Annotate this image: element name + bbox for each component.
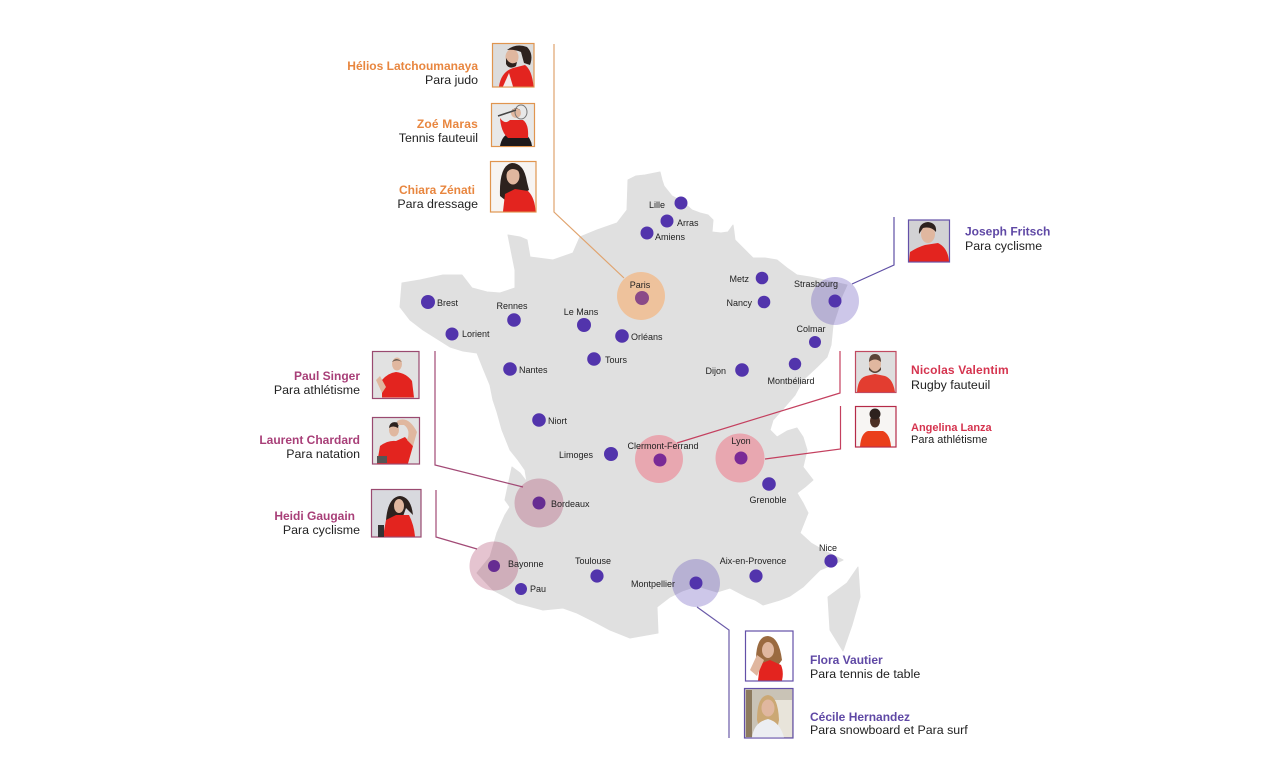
text: Angelina Lanza: Para athlétisme [911, 434, 987, 446]
text: Joseph Fritsch: Joseph Fritsch [965, 224, 1050, 238]
city labels: Aix-en-Provence [720, 556, 786, 566]
connector: Bayonne [436, 490, 477, 549]
text: Laurent Chardard [259, 433, 360, 461]
text: Chiara Zénati [397, 183, 478, 211]
text: Heidi Gaugain: Heidi Gaugain [274, 509, 355, 523]
text: Nicolas Valentim: Rugby fauteuil [911, 378, 990, 392]
city labels: Limoges [559, 450, 593, 460]
highlight: Montpellier [672, 559, 720, 607]
highlight: Strasbourg [811, 277, 859, 325]
city labels: Amiens [655, 232, 686, 242]
highlight: Clermont-Ferrand [635, 435, 683, 483]
text: Chiara Zénati: Chiara Zénati [399, 183, 475, 197]
text: Flora Vautier: Para tennis de table [810, 667, 920, 681]
text: Hélios Latchoumanaya: Hélios Latchoumanaya [347, 59, 478, 73]
text: Angelina Lanza [911, 422, 993, 446]
text: Zoé Maras [399, 117, 478, 145]
city labels: Colmar [796, 324, 826, 334]
city labels: Nancy [726, 298, 752, 308]
highlight: Paris [617, 272, 665, 320]
connector: Strasbourg [852, 217, 894, 284]
text: Nicolas Valentim [911, 363, 1009, 392]
connector: Paris [554, 44, 624, 278]
text: Paul Singer [274, 369, 360, 397]
text: Hélios Latchoumanaya: Para judo [425, 73, 478, 87]
photo: Chiara Zénati [490, 162, 536, 212]
photo: Hélios Latchoumanaya [492, 44, 534, 87]
city labels: Nice [819, 543, 837, 553]
photo: Flora Vautier [746, 631, 793, 681]
connector: Bordeaux [435, 351, 523, 487]
text: Paul Singer: Paul Singer [294, 369, 360, 383]
city labels: Lyon [731, 436, 751, 446]
city labels [437, 200, 838, 594]
city labels: Le Mans [564, 307, 599, 317]
city labels: Tours [605, 355, 628, 365]
city labels: Arras [677, 218, 699, 228]
city labels: Metz [729, 274, 749, 284]
photo: Laurent Chardard [372, 418, 420, 464]
city labels: Rennes [496, 301, 528, 311]
photo: Joseph Fritsch [908, 220, 950, 262]
text: Cécile Hernandez: Para snowboard et Para surf [810, 723, 968, 737]
city labels: Orléans [631, 332, 663, 342]
city labels: Niort [548, 416, 568, 426]
photo: Zoé Maras [492, 104, 534, 146]
text: Heidi Gaugain [274, 509, 360, 537]
text: Laurent Chardard: Para natation [286, 447, 360, 461]
highlight: Bordeaux [514, 478, 564, 528]
city labels: Bayonne [508, 559, 544, 569]
connector: Lyon [765, 406, 840, 459]
text: Flora Vautier: Flora Vautier [810, 653, 883, 667]
city labels: Paris [630, 280, 651, 290]
city labels: Toulouse [575, 556, 611, 566]
connector: Clermont-Ferrand [677, 351, 840, 443]
city labels: Clermont-Ferrand [627, 441, 699, 451]
photo: Paul Singer [372, 352, 419, 398]
city dots [421, 196, 842, 595]
text: Zoé Maras: Tennis fauteuil [399, 131, 478, 145]
highlighted city dots [488, 291, 748, 572]
photo: Cécile Hernandez [744, 688, 793, 738]
city labels: Brest [437, 298, 459, 308]
city labels: Strasbourg [794, 279, 838, 289]
highlight: Lyon [716, 434, 764, 482]
text: Cécile Hernandez: Cécile Hernandez [810, 710, 910, 724]
text: Laurent Chardard: Laurent Chardard [259, 433, 360, 447]
photo: Angelina Lanza [856, 406, 896, 447]
text: Chiara Zénati: Para dressage [397, 197, 478, 211]
connector: Montpellier [697, 607, 729, 738]
city labels: Montpellier [631, 579, 675, 589]
text: Paul Singer: Para athlétisme [274, 383, 360, 397]
text: Zoé Maras: Zoé Maras [417, 117, 478, 131]
highlight: Bayonne [470, 542, 518, 590]
city labels: Dijon [705, 366, 726, 376]
text: Nicolas Valentim: Nicolas Valentim [911, 363, 1009, 377]
text: Angelina Lanza: Angelina Lanza [911, 422, 993, 434]
text: Joseph Fritsch [965, 224, 1050, 253]
city labels: Bordeaux [551, 499, 590, 509]
city labels: Grenoble [749, 495, 787, 505]
city labels: Nantes [519, 365, 548, 375]
city labels: Pau [530, 584, 546, 594]
city labels: Lorient [462, 329, 490, 339]
text: Flora Vautier [810, 653, 920, 681]
photo: Heidi Gaugain [372, 490, 421, 537]
map of France [400, 172, 860, 651]
text: Joseph Fritsch: Para cyclisme [965, 239, 1042, 253]
city labels: Lille [649, 200, 665, 210]
text: Hélios Latchoumanaya [347, 59, 478, 87]
text: Cécile Hernandez [810, 710, 968, 737]
text: Heidi Gaugain: Para cyclisme [283, 523, 360, 537]
photo: Nicolas Valentim [856, 352, 896, 392]
city labels: Montbéliard [767, 376, 815, 386]
